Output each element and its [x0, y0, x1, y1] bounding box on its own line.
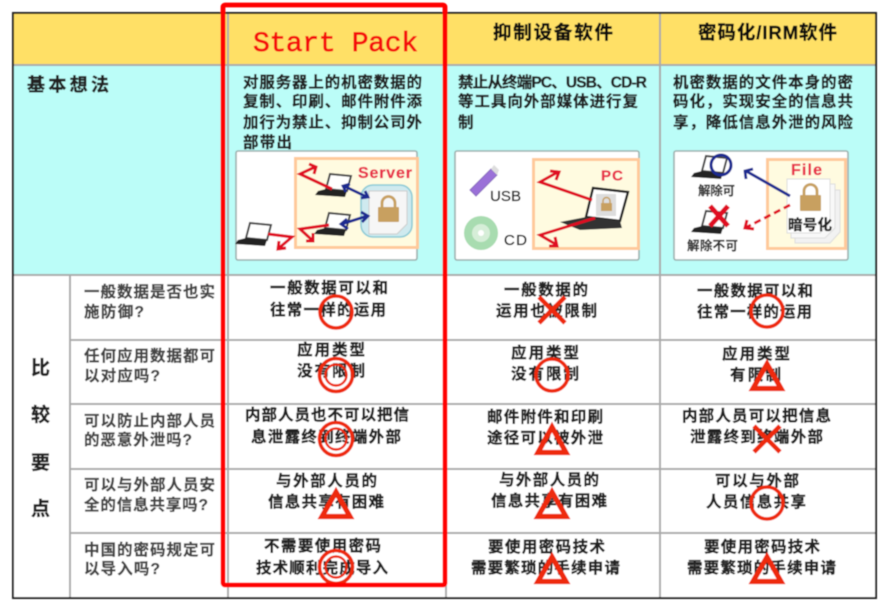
answers: Start Pack column: 技术顺利完成导入 — [256, 558, 388, 577]
answers: Start Pack column: 一般数据可以和 — [270, 279, 388, 297]
illustration: USB, CD and PC: USB — [490, 188, 521, 205]
illustration: encrypted file — [674, 151, 848, 260]
text: device control basic idea: 等工具向外部媒体进行复 — [458, 92, 638, 110]
header: 密码化/IRM软件: 密码化/IRM软件 — [698, 22, 837, 43]
answers: encryption column: 往常一样的运用 — [697, 302, 812, 321]
question: row 2: 任何应用数据都可 — [84, 346, 215, 365]
question: row 4: 可以与外部人员安 — [84, 475, 215, 494]
answers: encryption column: 人员信息共享 — [706, 492, 806, 511]
question: row 4 — [84, 475, 215, 514]
answers: encryption column: 要使用密码技术 — [704, 537, 820, 556]
answers: Start Pack column: 与外部人员的 — [276, 471, 377, 490]
text: Start Pack basic idea: 部带出 — [243, 132, 292, 152]
answers: device control column: 需要繁琐的手续申请 — [471, 558, 620, 577]
answers: encryption column: 泄露终到终端外部 — [690, 427, 823, 446]
answers: device control column — [471, 281, 620, 577]
answers: device control column: 信息共享有困难 — [491, 491, 607, 510]
text: device control basic idea — [458, 74, 647, 132]
side label: 比较要点 — [31, 357, 50, 520]
text: encryption basic idea: 码化，实现安全的信息共 — [673, 92, 853, 110]
answers: encryption column: 应用类型 — [722, 344, 790, 363]
text: device control basic idea: 禁止从终端PC、USB、CD-R — [458, 74, 647, 92]
side label: 比较要点: 点 — [31, 498, 50, 520]
text: device control basic idea: 制 — [458, 114, 474, 132]
answers: device control column: 邮件附件和印刷 — [487, 408, 603, 426]
text: encryption basic idea — [673, 72, 853, 132]
answers: Start Pack column: 内部人员也不可以把信 — [245, 405, 409, 424]
side label: 比较要点: 要 — [31, 453, 50, 474]
question: row 1: 一般数据是否也实 — [84, 282, 215, 301]
question: row 4: 全的信息共享吗? — [84, 495, 208, 514]
answers: encryption column: 有限制 — [730, 366, 781, 384]
text: Start Pack basic idea — [243, 72, 422, 152]
illustration: USB, CD and PC: PC — [601, 168, 623, 184]
answers: encryption column: 内部人员可以把信息 — [682, 406, 831, 425]
highlight frame: Start Pack column — [223, 5, 445, 585]
illustration: encrypted file: File — [791, 162, 822, 179]
answers: device control column: 与外部人员的 — [499, 470, 599, 489]
answers: encryption column: 一般数据可以和 — [697, 282, 813, 300]
question: row 5: 中国的密码规定可 — [84, 540, 215, 559]
question: row 1: 施防御? — [84, 302, 144, 321]
text: encryption basic idea: 机密数据的文件本身的密 — [673, 72, 853, 92]
answers: Start Pack column — [245, 279, 409, 577]
answers: Start Pack column: 往常一样的运用 — [270, 300, 386, 319]
illustration: encrypted file: 解除不可 — [687, 238, 738, 253]
answers: device control column: 应用类型 — [511, 343, 579, 362]
illustration: server — [235, 151, 418, 260]
side label: 比较要点: 较 — [31, 403, 50, 426]
row label: 基本想法: 基本想法 — [27, 75, 109, 95]
illustration: USB, CD and PC: CD — [504, 232, 527, 249]
question: row 5: 以导入吗? — [84, 560, 160, 578]
answers: Start Pack column: 信息共享有困难 — [268, 492, 384, 511]
answers: encryption column: 可以与外部 — [715, 471, 799, 490]
illustration: server: Server — [358, 165, 412, 182]
text: Start Pack basic idea: 对服务器上的机密数据的 — [243, 72, 422, 92]
question: row 1 — [84, 282, 215, 321]
answers: Start Pack column: 息泄露终到终端外部 — [251, 427, 401, 446]
illustration: USB, CD and PC — [455, 151, 639, 260]
illustration: encrypted file: 解除可 — [698, 183, 735, 198]
rating marks: device control column — [536, 297, 568, 582]
answers: encryption column: 需要繁琐的手续申请 — [687, 558, 836, 577]
answers: device control column: 要使用密码技术 — [488, 537, 605, 556]
answers: device control column: 途径可以被外泄 — [487, 428, 603, 447]
header: 抑制设备软件: 抑制设备软件 — [493, 22, 613, 43]
rating marks: Start Pack column — [320, 296, 352, 584]
side label: 比较要点: 比 — [31, 357, 50, 379]
answers: Start Pack column: 不需要使用密码 — [264, 536, 381, 555]
answers: device control column: 运用也被限制 — [496, 302, 597, 320]
text: Start Pack basic idea: 加行为禁止、抑制公司外 — [243, 112, 422, 132]
text: Start Pack basic idea: 复制、印刷、邮件附件添 — [243, 92, 422, 110]
answers: encryption column — [682, 282, 836, 577]
answers: Start Pack column: 没有限制 — [297, 362, 365, 380]
rating marks: encryption column — [751, 295, 783, 582]
question: row 5 — [84, 540, 215, 578]
question: row 3: 的恶意外泄吗? — [84, 430, 192, 449]
text: encryption basic idea: 享，降低信息外泄的风险 — [673, 112, 853, 132]
answers: device control column: 一般数据的 — [504, 281, 588, 299]
question: row 3: 可以防止内部人员 — [84, 411, 215, 430]
question: row 3 — [84, 411, 215, 449]
answers: Start Pack column: 应用类型 — [297, 340, 365, 359]
question: row 2: 以对应吗? — [84, 366, 160, 385]
illustration: encrypted file: 暗号化 — [788, 216, 832, 234]
question: row 2 — [84, 346, 215, 385]
answers: device control column: 没有限制 — [511, 365, 579, 383]
header: Start Pack: Start Pack — [253, 29, 418, 60]
